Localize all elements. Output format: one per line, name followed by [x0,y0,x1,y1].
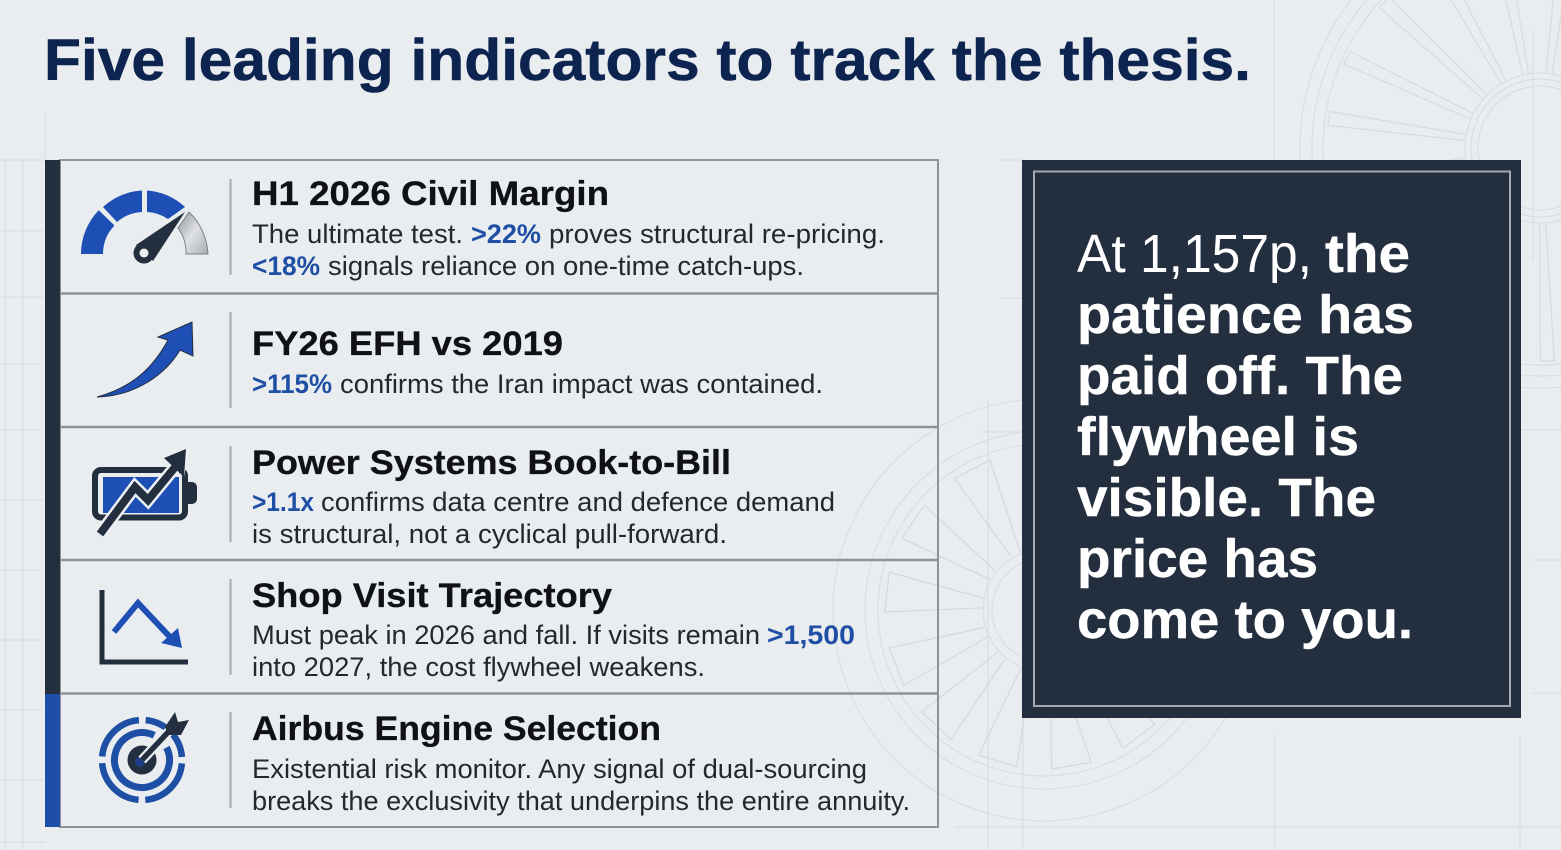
callout text: visible. The [1077,468,1376,528]
indicator: Airbus Engine Selection [102,710,910,816]
heading: Shop Visit Trajectory [252,577,612,615]
text block: >22% [471,219,541,249]
text block: >115% [252,369,332,399]
indicator: Power Systems Book-to-Bill [95,444,835,549]
panel: indicators list [45,160,938,827]
heading: Airbus Engine Selection [252,710,661,748]
indicator: Shop Visit Trajectory [102,577,855,682]
icon: rising arrow [97,322,193,397]
text block: <18% [252,251,320,281]
icon: target with dart [102,712,189,800]
panel frame and accent bar [45,160,938,827]
callout text: patience has [1077,285,1414,345]
text block: into 2027, the cost flywheel weakens. [252,652,705,682]
text block [252,620,855,682]
text block: breaks the exclusivity that underpins the entire annuity. [252,786,910,816]
text block: Must peak in 2026 and fall. If visits remain [252,620,760,650]
icon: gauge [81,190,208,264]
indicator: H1 2026 Civil Margin [81,175,885,281]
callout text: flywheel is [1077,407,1359,467]
text block: signals reliance on one-time catch-ups. [328,251,804,281]
text block: proves structural re-pricing. [549,219,885,249]
icon: battery with growth arrow [95,446,197,534]
text block: is structural, not a cyclical pull-forward. [252,519,727,549]
icon: declining line chart [102,590,188,662]
heading: Power Systems Book-to-Bill [252,444,731,482]
callout text: price has [1077,529,1318,589]
callout text: At 1,157p, [1077,224,1312,284]
callout text: come to you. [1077,590,1413,650]
callout text: the [1325,224,1410,284]
text block: >1.1x [252,487,314,517]
heading: FY26 EFH vs 2019 [252,325,563,363]
panel: conclusion callout [1022,160,1521,718]
text block: >1,500 [767,620,855,650]
text block [252,487,835,549]
text block [252,219,885,281]
callout text [1077,224,1414,650]
callout text: paid off. The [1077,346,1403,406]
text block: The ultimate test. [252,219,463,249]
text block: confirms data centre and defence demand [321,487,835,517]
title: Five leading indicators to track the thesis. [44,28,1251,93]
text block: Existential risk monitor. Any signal of dual-sourcing [252,754,867,784]
text block [252,754,910,816]
heading: H1 2026 Civil Margin [252,175,609,213]
indicator: FY26 EFH vs 2019 [97,322,823,399]
text block: confirms the Iran impact was contained. [340,369,823,399]
